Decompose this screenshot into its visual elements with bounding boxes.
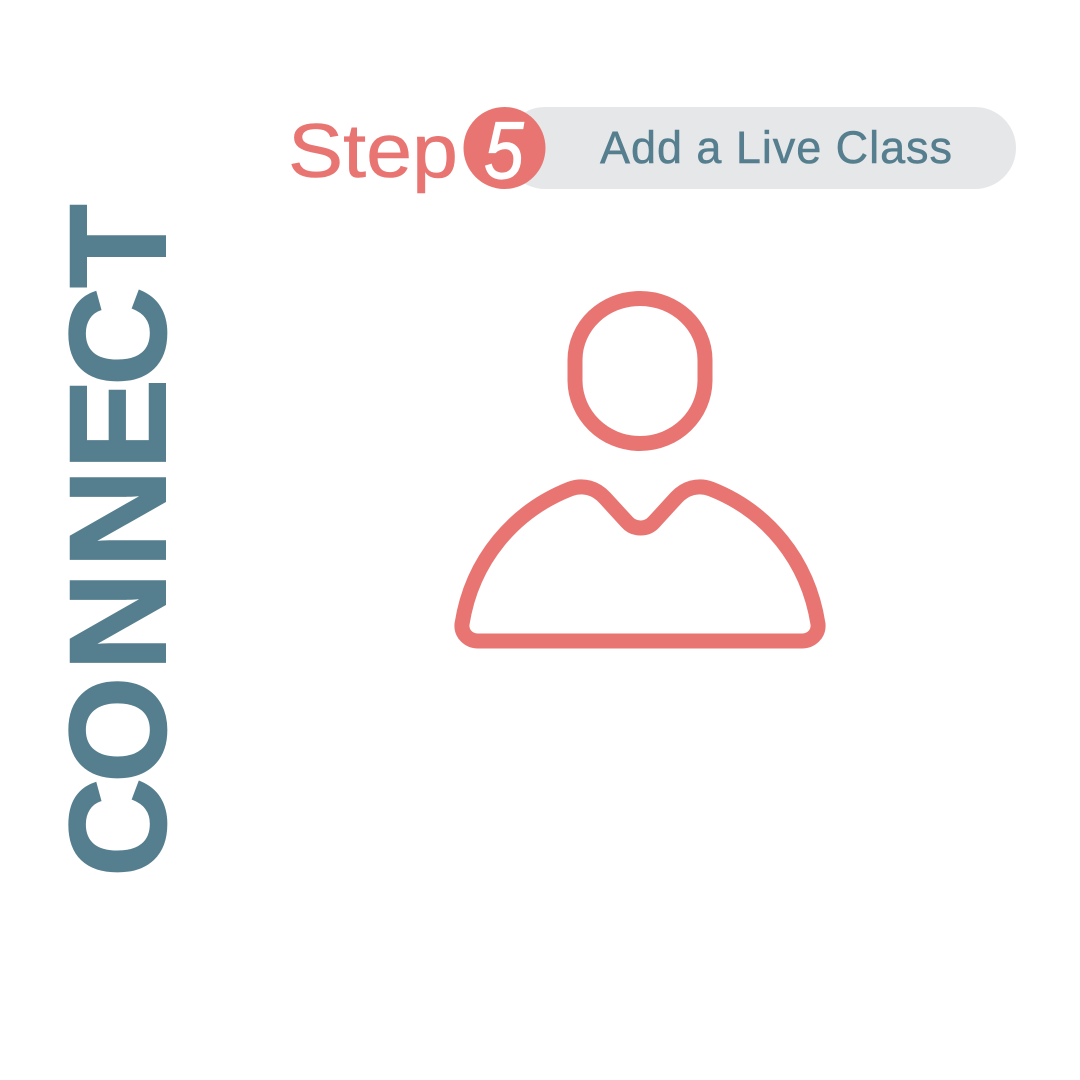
vertical heading: CONNECT: CONNECT xyxy=(42,204,195,877)
step number badge: 5 xyxy=(484,106,524,196)
icon: person outline xyxy=(462,298,818,641)
icon: person head xyxy=(575,298,705,444)
step number badge xyxy=(464,106,546,196)
step title: Add a Live Class xyxy=(600,122,952,173)
step pill bar xyxy=(504,107,1016,189)
icon: person shoulders xyxy=(462,487,818,641)
step label: Step xyxy=(288,109,458,194)
